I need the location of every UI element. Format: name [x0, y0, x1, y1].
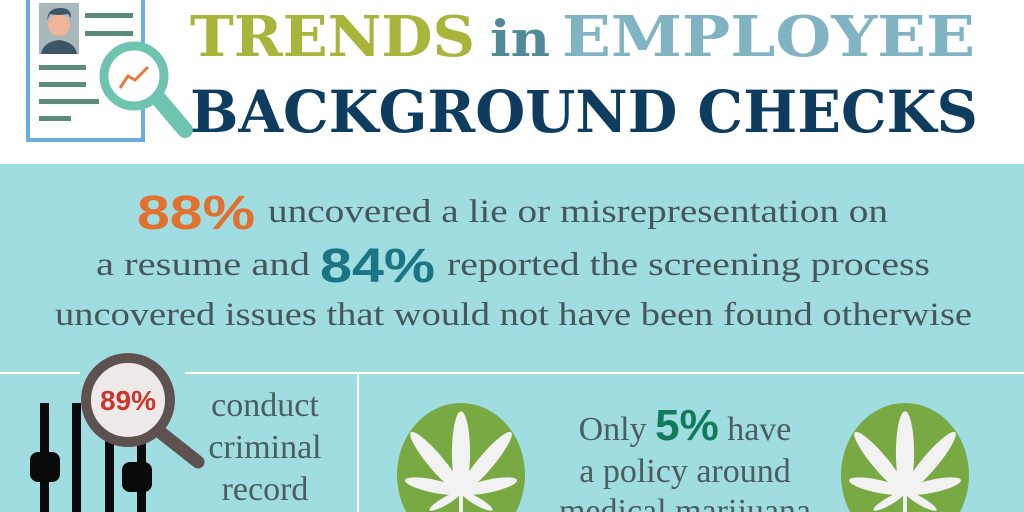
headline stat text: 84%	[320, 240, 435, 293]
text: only 5% policy	[559, 401, 811, 512]
text: conduct criminal record: criminal	[208, 429, 322, 466]
teal background panel	[0, 164, 1024, 512]
text: only 5% policy: Only 5% have	[579, 401, 791, 450]
headline stat text: 88%	[137, 187, 255, 240]
icon: jail bars with hands	[30, 403, 152, 512]
headline stat text: uncovered a lie or misrepresentation on	[268, 194, 888, 230]
title: in	[490, 9, 550, 68]
headline stat text	[55, 187, 972, 333]
text: conduct criminal record	[208, 387, 322, 508]
headline stat text: a resume and	[96, 247, 311, 283]
title	[190, 4, 978, 146]
magnifier with 89%	[86, 358, 198, 462]
divider lines	[0, 372, 80, 374]
icon: resume with magnifier	[28, 0, 185, 140]
magnifier with 89%: 89%	[100, 385, 156, 416]
header background	[0, 0, 1024, 164]
text: conduct criminal record: record	[222, 471, 308, 508]
headline stat text: reported the screening process	[447, 247, 930, 283]
icon: marijuana leaf left	[397, 403, 525, 512]
text: only 5% policy: a policy around	[579, 453, 791, 490]
text: conduct criminal record: conduct	[211, 387, 319, 424]
title: BACKGROUND CHECKS	[190, 78, 978, 146]
title: EMPLOYEE	[562, 4, 975, 70]
title: TRENDS	[190, 4, 475, 70]
headline stat text: uncovered issues that would not have been found otherwise	[55, 297, 972, 333]
icon: marijuana leaf right	[841, 403, 969, 512]
